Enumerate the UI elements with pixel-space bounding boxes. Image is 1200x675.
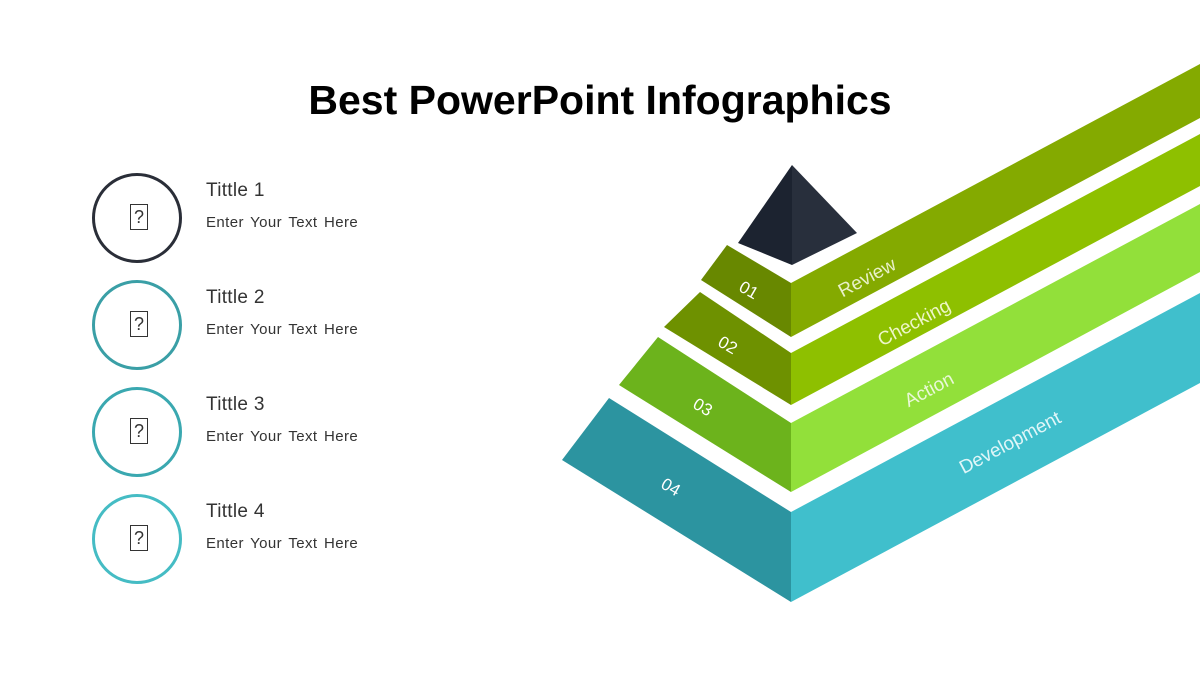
tier 1 review: 01 — [736, 277, 762, 303]
tier 3 action: 03 — [690, 394, 716, 420]
item 4 — [92, 494, 358, 584]
item 3: Enter Your Text Here — [206, 428, 358, 445]
item 1: Tittle 1 — [206, 180, 265, 201]
item 2 — [92, 280, 358, 370]
tier 4 development: Development — [956, 407, 1065, 479]
item 1: ? — [134, 207, 144, 227]
item 3: Tittle 3 — [206, 394, 265, 415]
item 4: Tittle 4 — [206, 501, 265, 522]
item 4: Enter Your Text Here — [206, 535, 358, 552]
item 3: ? — [134, 421, 144, 441]
item 4: ? — [134, 528, 144, 548]
item 1 — [92, 173, 358, 263]
tier 2 checking: 02 — [715, 332, 741, 358]
tier 3 action — [619, 204, 1200, 492]
tier 4 development — [562, 293, 1200, 602]
item 2: Enter Your Text Here — [206, 321, 358, 338]
tier 1 review — [701, 64, 1200, 337]
tier 2 checking — [664, 134, 1200, 405]
tier 3 action: Action — [901, 368, 958, 412]
title: Best PowerPoint Infographics — [308, 77, 892, 123]
tier 1 review: Review — [835, 254, 900, 302]
item 2: Tittle 2 — [206, 287, 265, 308]
tier 2 checking: Checking — [875, 295, 954, 351]
item 1: Enter Your Text Here — [206, 214, 358, 231]
cap — [738, 165, 857, 265]
tier 4 development: 04 — [658, 474, 684, 500]
item 2: ? — [134, 314, 144, 334]
item 3 — [92, 387, 358, 477]
